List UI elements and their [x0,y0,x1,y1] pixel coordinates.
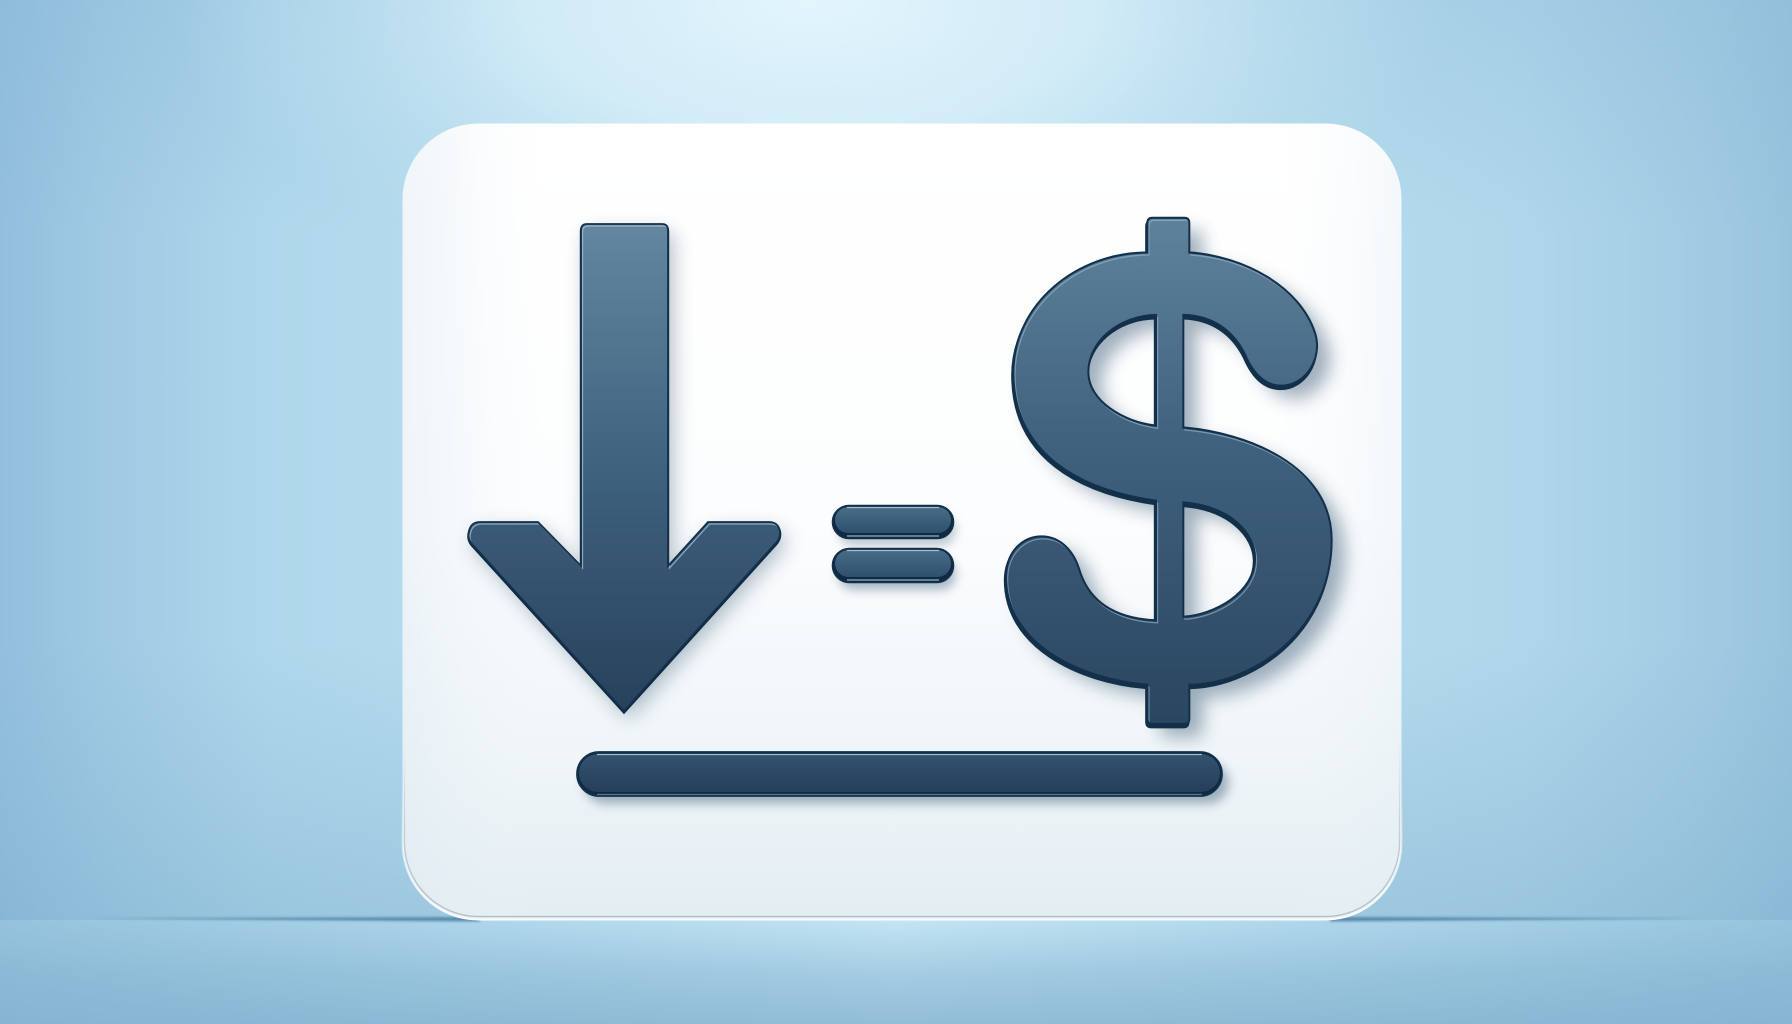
equals: upper bar [832,506,954,538]
floor horizon line [90,917,1702,922]
panel: white card [402,124,1402,920]
icon: equals sign [832,506,956,590]
icon: down arrow [468,224,785,719]
icon: underline bar [577,752,1229,804]
equals: lower bar [832,548,954,582]
floor [0,920,1792,1024]
icon: dollar sign [1005,218,1345,737]
